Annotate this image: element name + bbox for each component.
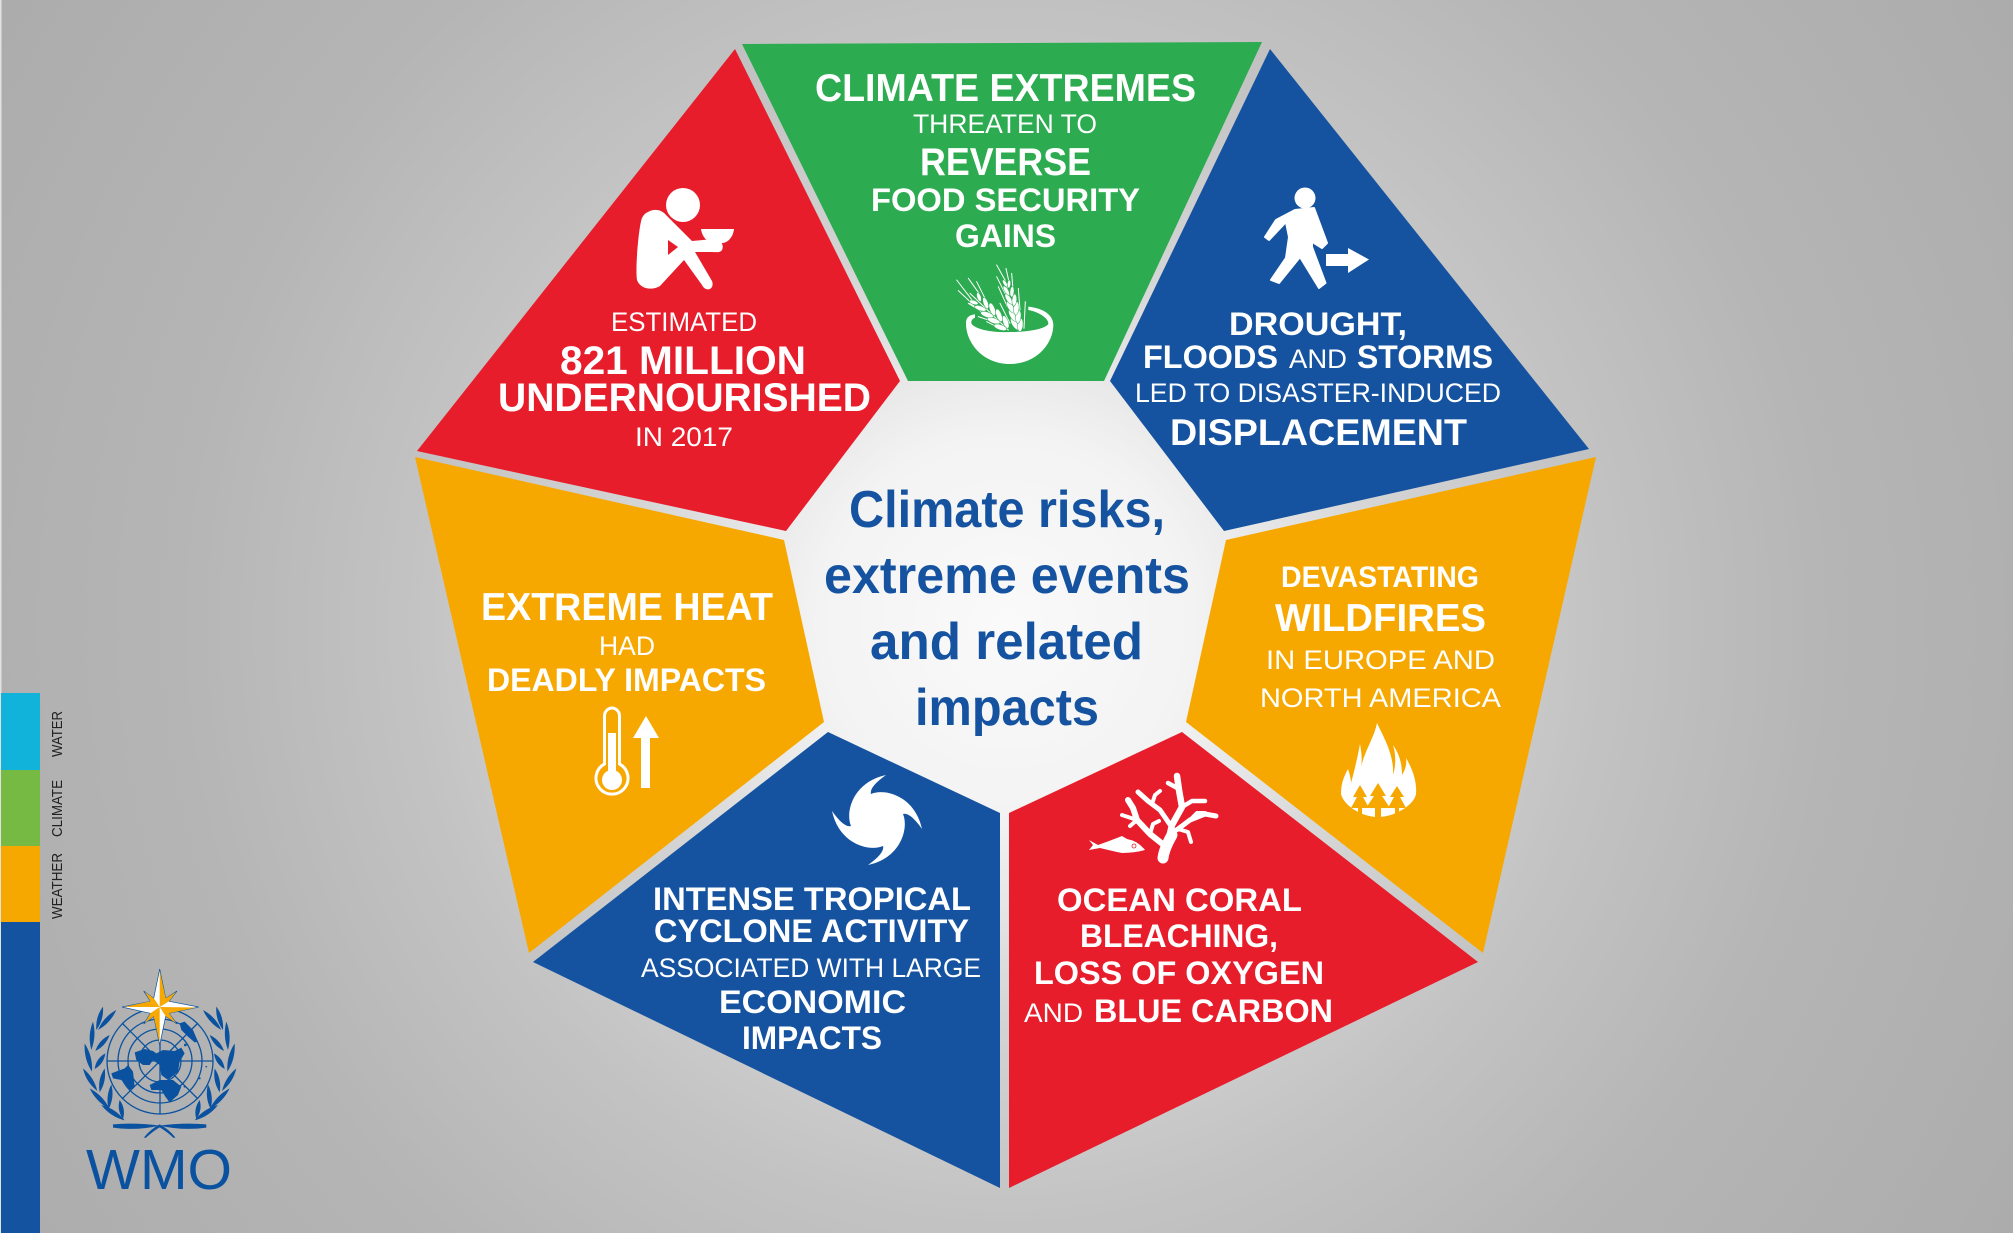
text: ocean coral bleaching, loss of oxygen and blue carbon [1024,882,1333,1029]
text: drought, floods and storms led to displacement [1135,306,1501,453]
icon: wheat in bowl [957,265,1053,364]
icon: coral and fish [1089,776,1216,858]
text: devastating wildfires: NORTH AMERICA [1260,683,1501,713]
heading: climate extremes threaten food security: REVERSE [920,141,1091,184]
sidebar labels: CLIMATE [50,780,66,837]
text: 821 million undernourished [498,307,871,452]
text: ocean coral bleaching, loss of oxygen and blue carbon: BLEACHING, [1080,918,1278,954]
text: ocean coral bleaching, loss of oxygen and blue carbon: AND [1024,998,1083,1028]
text: 821 million undernourished: ESTIMATED [611,307,757,337]
icon: walking person with arrow [1265,188,1369,288]
text: intense tropical cyclone activity: INTENSE TROPICAL [653,881,971,917]
icon: seated person with bowl [636,188,734,289]
text: extreme heat had deadly impacts: HAD [599,631,655,661]
panel: cyclones (blue) [533,732,1000,1188]
text: intense tropical cyclone activity: CYCLONE ACTIVITY [654,913,969,949]
text: devastating wildfires: WILDFIRES [1275,597,1486,640]
text: ocean coral bleaching, loss of oxygen and blue carbon: BLUE CARBON [1094,993,1333,1029]
centre title: impacts [915,679,1099,737]
text: extreme heat had deadly impacts: DEADLY IMPACTS [487,662,766,698]
text: intense tropical cyclone activity: ASSOCIATED WITH LARGE [641,953,981,983]
heading: climate extremes threaten food security [815,67,1196,254]
text: devastating wildfires [1260,561,1501,713]
text: drought, floods and storms led to displacement: DISPLACEMENT [1170,412,1467,453]
continents [111,1022,207,1102]
sidebar labels: WEATHER [50,853,66,919]
text: intense tropical cyclone activity [641,881,981,1056]
text: drought, floods and storms led to displacement: STORMS [1357,339,1493,375]
text: 821 million undernourished: IN 2017 [635,422,733,452]
text: drought, floods and storms led to displacement: DROUGHT, [1229,306,1407,342]
WMO wordmark: WMO [86,1138,232,1202]
text: extreme heat had deadly impacts [481,586,773,698]
heading: climate extremes threaten food security: FOOD SECURITY [871,182,1140,218]
text: drought, floods and storms led to displacement: LED TO DISASTER-INDUCED [1135,378,1501,408]
text: ocean coral bleaching, loss of oxygen and blue carbon: LOSS OF OXYGEN [1034,955,1324,991]
text: intense tropical cyclone activity: ECONOMIC [719,984,906,1020]
WMO logo [83,969,236,1202]
sidebar labels: WATER [50,711,66,757]
centre title: and related [870,613,1143,671]
text: ocean coral bleaching, loss of oxygen and blue carbon: OCEAN CORAL [1057,882,1302,918]
colour sidebar: water, climate, weather [1,693,40,1233]
compass star [122,969,199,1045]
heading: climate extremes threaten food security: THREATEN TO [913,109,1097,139]
text: intense tropical cyclone activity: IMPACTS [742,1020,882,1056]
heading: climate extremes threaten food security: CLIMATE EXTREMES [815,67,1196,110]
panel: ocean (red) [1009,732,1478,1188]
text: devastating wildfires: IN EUROPE AND [1266,645,1495,675]
centre title [824,481,1190,737]
panel: undernourished (red) [417,49,900,531]
panel: food security (green) [742,42,1262,381]
globe [107,1008,213,1114]
laurel wreath [83,1007,236,1138]
centre title: Climate risks, [849,481,1165,539]
text: 821 million undernourished: 821 MILLION [560,339,806,383]
centre title: extreme events [824,547,1190,605]
icon: thermometer and up arrow [596,708,659,794]
panel: wildfires (amber) [1186,457,1596,953]
text: drought, floods and storms led to displacement: AND [1289,344,1347,374]
text: extreme heat had deadly impacts: EXTREME HEAT [481,586,773,629]
heading: climate extremes threaten food security: GAINS [955,218,1056,254]
icon: tropical cyclone [832,775,922,865]
text: devastating wildfires: DEVASTATING [1281,561,1479,594]
text: 821 million undernourished: UNDERNOURISHED [498,376,871,420]
panel: extreme heat (amber) [415,457,824,953]
icon: flame with trees [1341,723,1416,817]
sidebar labels [50,711,66,919]
panel: displacement (blue) [1110,49,1589,531]
text: drought, floods and storms led to displacement: FLOODS [1143,339,1278,375]
